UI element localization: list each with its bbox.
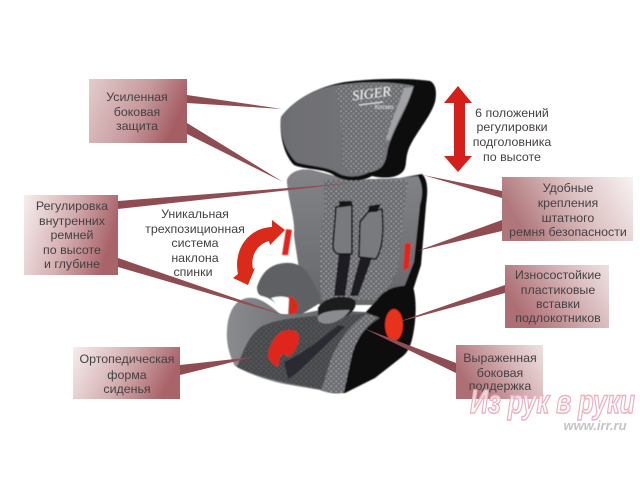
callout: armrest inserts [505, 265, 609, 328]
callout: belt mounts [502, 177, 633, 241]
callout: harness adjustment: по высоте [43, 243, 101, 257]
height arrow [444, 86, 472, 172]
red insert: belt guide right [403, 243, 411, 271]
callout: side protection [89, 79, 187, 143]
text: headrest positions: регулировки [476, 120, 548, 134]
text: headrest positions [473, 106, 551, 164]
brand logo: SIGER [351, 85, 392, 104]
callout: harness adjustment: и глубине [44, 257, 100, 271]
red insert: belt guide left [282, 229, 292, 255]
text: headrest positions: по высоте [483, 150, 541, 164]
callout: belt mounts: штатного [542, 211, 594, 225]
callout: side support: поддержка [469, 379, 531, 393]
callout: harness adjustment [24, 195, 118, 275]
text: recline system: наклона [171, 251, 219, 265]
headrest [281, 79, 436, 180]
red insert: armrest [288, 296, 298, 314]
callout: armrest inserts: Износостойкие [515, 268, 601, 282]
watermark: www.irr.ru [563, 418, 627, 433]
text: recline system: Уникальная [161, 207, 229, 221]
recline arrow [233, 220, 285, 285]
red insert: armrest side [385, 309, 403, 341]
callout: orthopedic seat [73, 347, 180, 399]
armrest [257, 263, 321, 314]
callout: armrest inserts: пластиковые [521, 283, 595, 297]
callout: harness adjustment: Регулировка [36, 199, 108, 213]
callout: belt mounts: ремня безопасности [509, 225, 627, 239]
callout: harness adjustment: внутренних [39, 214, 106, 228]
callout: orthopedic seat: Ортопедическая [80, 352, 174, 366]
car seat illustration [227, 79, 436, 393]
seat side block [333, 286, 416, 393]
text: recline system: трехпозиционная [145, 222, 245, 236]
callout: belt mounts: крепления [538, 196, 598, 210]
brand logo: Космо [375, 104, 394, 111]
text: recline system [145, 207, 245, 279]
callout: harness adjustment: ремней [51, 228, 94, 242]
callout: side support: Выраженная [463, 351, 537, 365]
buckle [318, 297, 356, 324]
callout: side support: боковая [477, 366, 523, 380]
callout: orthopedic seat: сиденья [103, 382, 151, 396]
callout: orthopedic seat: форма [107, 368, 147, 382]
backrest [287, 169, 427, 305]
callout: armrest inserts: подлокотников [515, 311, 601, 325]
text: recline system: спинки [173, 265, 213, 279]
callout: side protection: боковая [114, 105, 160, 119]
harness pads and belts [333, 201, 383, 296]
text: recline system: система [171, 236, 219, 250]
red insert: seat belt guide [268, 330, 299, 367]
callout: belt mounts: Удобные [543, 181, 593, 195]
leader lines [118, 95, 505, 375]
text: headrest positions: подголовника [473, 135, 551, 149]
callout: side protection: защита [116, 119, 158, 133]
callout: armrest inserts: вставки [536, 297, 580, 311]
text: headrest positions: 6 положений [475, 106, 549, 120]
callout: side support [456, 345, 543, 399]
seat cushion [227, 298, 380, 393]
callout: side protection: Усиленная [106, 90, 168, 104]
